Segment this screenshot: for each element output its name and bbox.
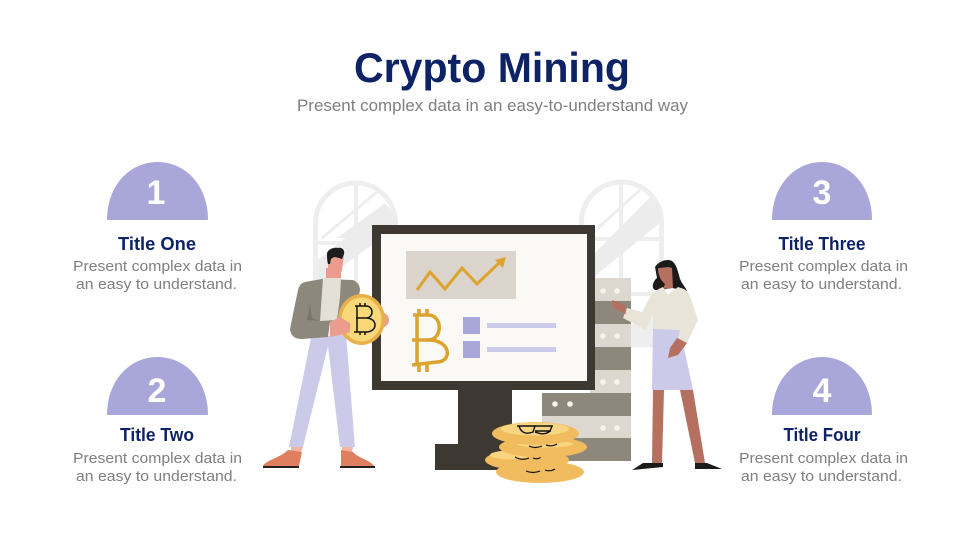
man head bbox=[328, 255, 344, 277]
man far hand bbox=[380, 312, 389, 328]
woman hands bbox=[612, 300, 687, 358]
body 3: an easy to understand. bbox=[741, 276, 902, 293]
man figure bbox=[263, 248, 389, 468]
man shirt bbox=[320, 278, 341, 321]
heading 4: Title Four bbox=[784, 425, 860, 445]
right window bbox=[582, 182, 662, 345]
heading 2: Title Two bbox=[120, 425, 194, 445]
monitor frame bbox=[372, 225, 595, 390]
item 4 bbox=[739, 357, 908, 485]
woman figure bbox=[612, 260, 722, 470]
badge 4 bbox=[772, 357, 872, 415]
woman skirt bbox=[652, 329, 693, 390]
man hair bbox=[327, 248, 344, 264]
bottom coin bbox=[496, 461, 584, 483]
badge 3 bbox=[772, 162, 872, 220]
badge 2 bbox=[107, 357, 208, 415]
monitor screen bbox=[381, 234, 587, 381]
monitor stand bbox=[435, 390, 512, 470]
number 4: 4 bbox=[813, 372, 832, 410]
body 2 bbox=[73, 450, 242, 485]
body 3 bbox=[739, 258, 908, 293]
man shoes bbox=[263, 447, 375, 468]
body 4 bbox=[739, 450, 908, 485]
icon: bitcoin symbol bbox=[412, 309, 447, 372]
number 1: 1 bbox=[147, 174, 165, 212]
woman shoes bbox=[632, 463, 722, 470]
top coin bbox=[492, 422, 579, 445]
second coin bbox=[499, 436, 587, 458]
item 3 bbox=[739, 162, 908, 293]
subtitle: Present complex data in an easy-to-understand way bbox=[297, 96, 688, 115]
body 2: Present complex data in bbox=[73, 450, 242, 467]
woman legs bbox=[652, 390, 705, 463]
body 4: Present complex data in bbox=[739, 450, 908, 467]
legend rows bbox=[463, 317, 556, 358]
monitor bbox=[372, 225, 595, 470]
third coin bbox=[485, 450, 569, 470]
left window bbox=[316, 183, 398, 285]
body 2: an easy to understand. bbox=[76, 468, 237, 485]
coin with bitcoin icon bbox=[338, 294, 385, 345]
heading 1: Title One bbox=[118, 234, 196, 254]
body 1 bbox=[73, 258, 242, 293]
server rack bbox=[542, 278, 631, 461]
heading 3: Title Three bbox=[778, 234, 866, 254]
woman blouse bbox=[623, 287, 698, 343]
jacket shade bbox=[307, 303, 320, 321]
title: Crypto Mining bbox=[354, 44, 630, 91]
man neck bbox=[326, 268, 341, 282]
body 1: an easy to understand. bbox=[76, 276, 237, 293]
body 3: Present complex data in bbox=[739, 258, 908, 275]
badge 1 bbox=[107, 162, 208, 220]
number 2: 2 bbox=[148, 372, 166, 410]
item 2 bbox=[73, 357, 242, 485]
body 1: Present complex data in bbox=[73, 258, 242, 275]
woman face and neck bbox=[658, 267, 673, 289]
man jacket bbox=[290, 279, 360, 339]
item 1 bbox=[73, 162, 242, 293]
line chart panel bbox=[406, 251, 516, 299]
coin stack bbox=[485, 422, 587, 483]
man legs bbox=[289, 334, 355, 447]
number 3: 3 bbox=[813, 174, 831, 212]
body 4: an easy to understand. bbox=[741, 468, 902, 485]
woman hair bbox=[653, 260, 687, 291]
man near hand bbox=[330, 317, 350, 337]
